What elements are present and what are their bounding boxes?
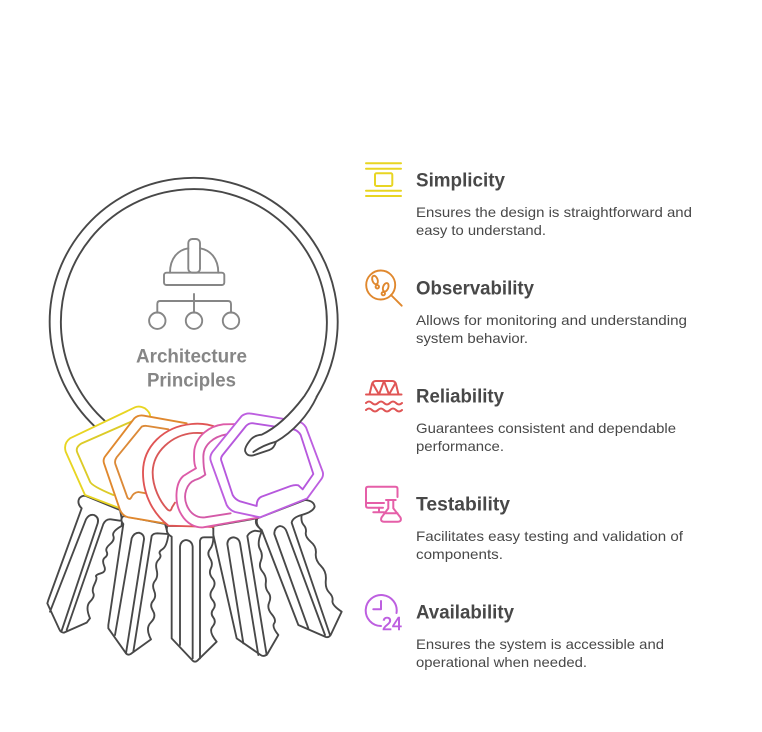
description: Availability: Ensures the system is accessible and xyxy=(416,636,664,652)
center title xyxy=(136,346,247,392)
key 1 xyxy=(47,496,122,633)
description: Availability xyxy=(416,636,664,670)
item: Reliability xyxy=(366,381,676,454)
center title: Principles xyxy=(147,370,236,392)
keyring illustration xyxy=(47,178,342,662)
heading: Availability: Availability xyxy=(416,602,514,624)
key 5 xyxy=(257,500,342,637)
item: Testability xyxy=(366,487,683,562)
icon text: 24: 24 xyxy=(382,614,402,634)
icon: simplicity xyxy=(366,163,401,196)
description: Simplicity: Ensures the design is straightforward and xyxy=(416,204,692,220)
key 4 xyxy=(213,518,278,656)
item: Simplicity xyxy=(366,163,692,238)
key head: red xyxy=(143,424,217,527)
item: Observability xyxy=(366,270,687,346)
key 2 xyxy=(108,516,168,655)
icon: availability xyxy=(366,595,397,626)
description: Reliability xyxy=(416,420,676,454)
description: Observability: Allows for monitoring and understanding xyxy=(416,312,687,328)
heading: Observability: Observability xyxy=(416,278,534,300)
description: Testability xyxy=(416,528,683,562)
heading: Simplicity: Simplicity xyxy=(416,170,505,192)
center icon: helmet and hierarchy xyxy=(149,239,239,329)
keyring hook end xyxy=(245,397,317,456)
key head: yellow xyxy=(65,407,150,508)
icon: reliability xyxy=(366,381,402,412)
key head: pink xyxy=(176,424,260,527)
description: Observability xyxy=(416,312,687,346)
key 3 xyxy=(167,526,217,662)
keyring loop xyxy=(50,178,338,427)
heading: Testability: Testability xyxy=(416,494,510,516)
description: Availability: operational when needed. xyxy=(416,654,587,670)
description: Simplicity xyxy=(416,204,692,238)
description: Testability: Facilitates easy testing and validation of xyxy=(416,528,683,544)
icon: observability xyxy=(366,270,402,306)
description: Simplicity: easy to understand. xyxy=(416,222,546,238)
description: Observability: system behavior. xyxy=(416,330,528,346)
description: Reliability: Guarantees consistent and dependable xyxy=(416,420,676,436)
description: Testability: components. xyxy=(416,546,503,562)
icon: testability xyxy=(366,487,401,522)
heading: Reliability: Reliability xyxy=(416,386,504,408)
description: Reliability: performance. xyxy=(416,438,504,454)
key head: orange xyxy=(104,415,187,524)
center title: Architecture xyxy=(136,346,247,368)
key head: purple xyxy=(210,413,323,517)
item: Availability xyxy=(366,595,664,670)
